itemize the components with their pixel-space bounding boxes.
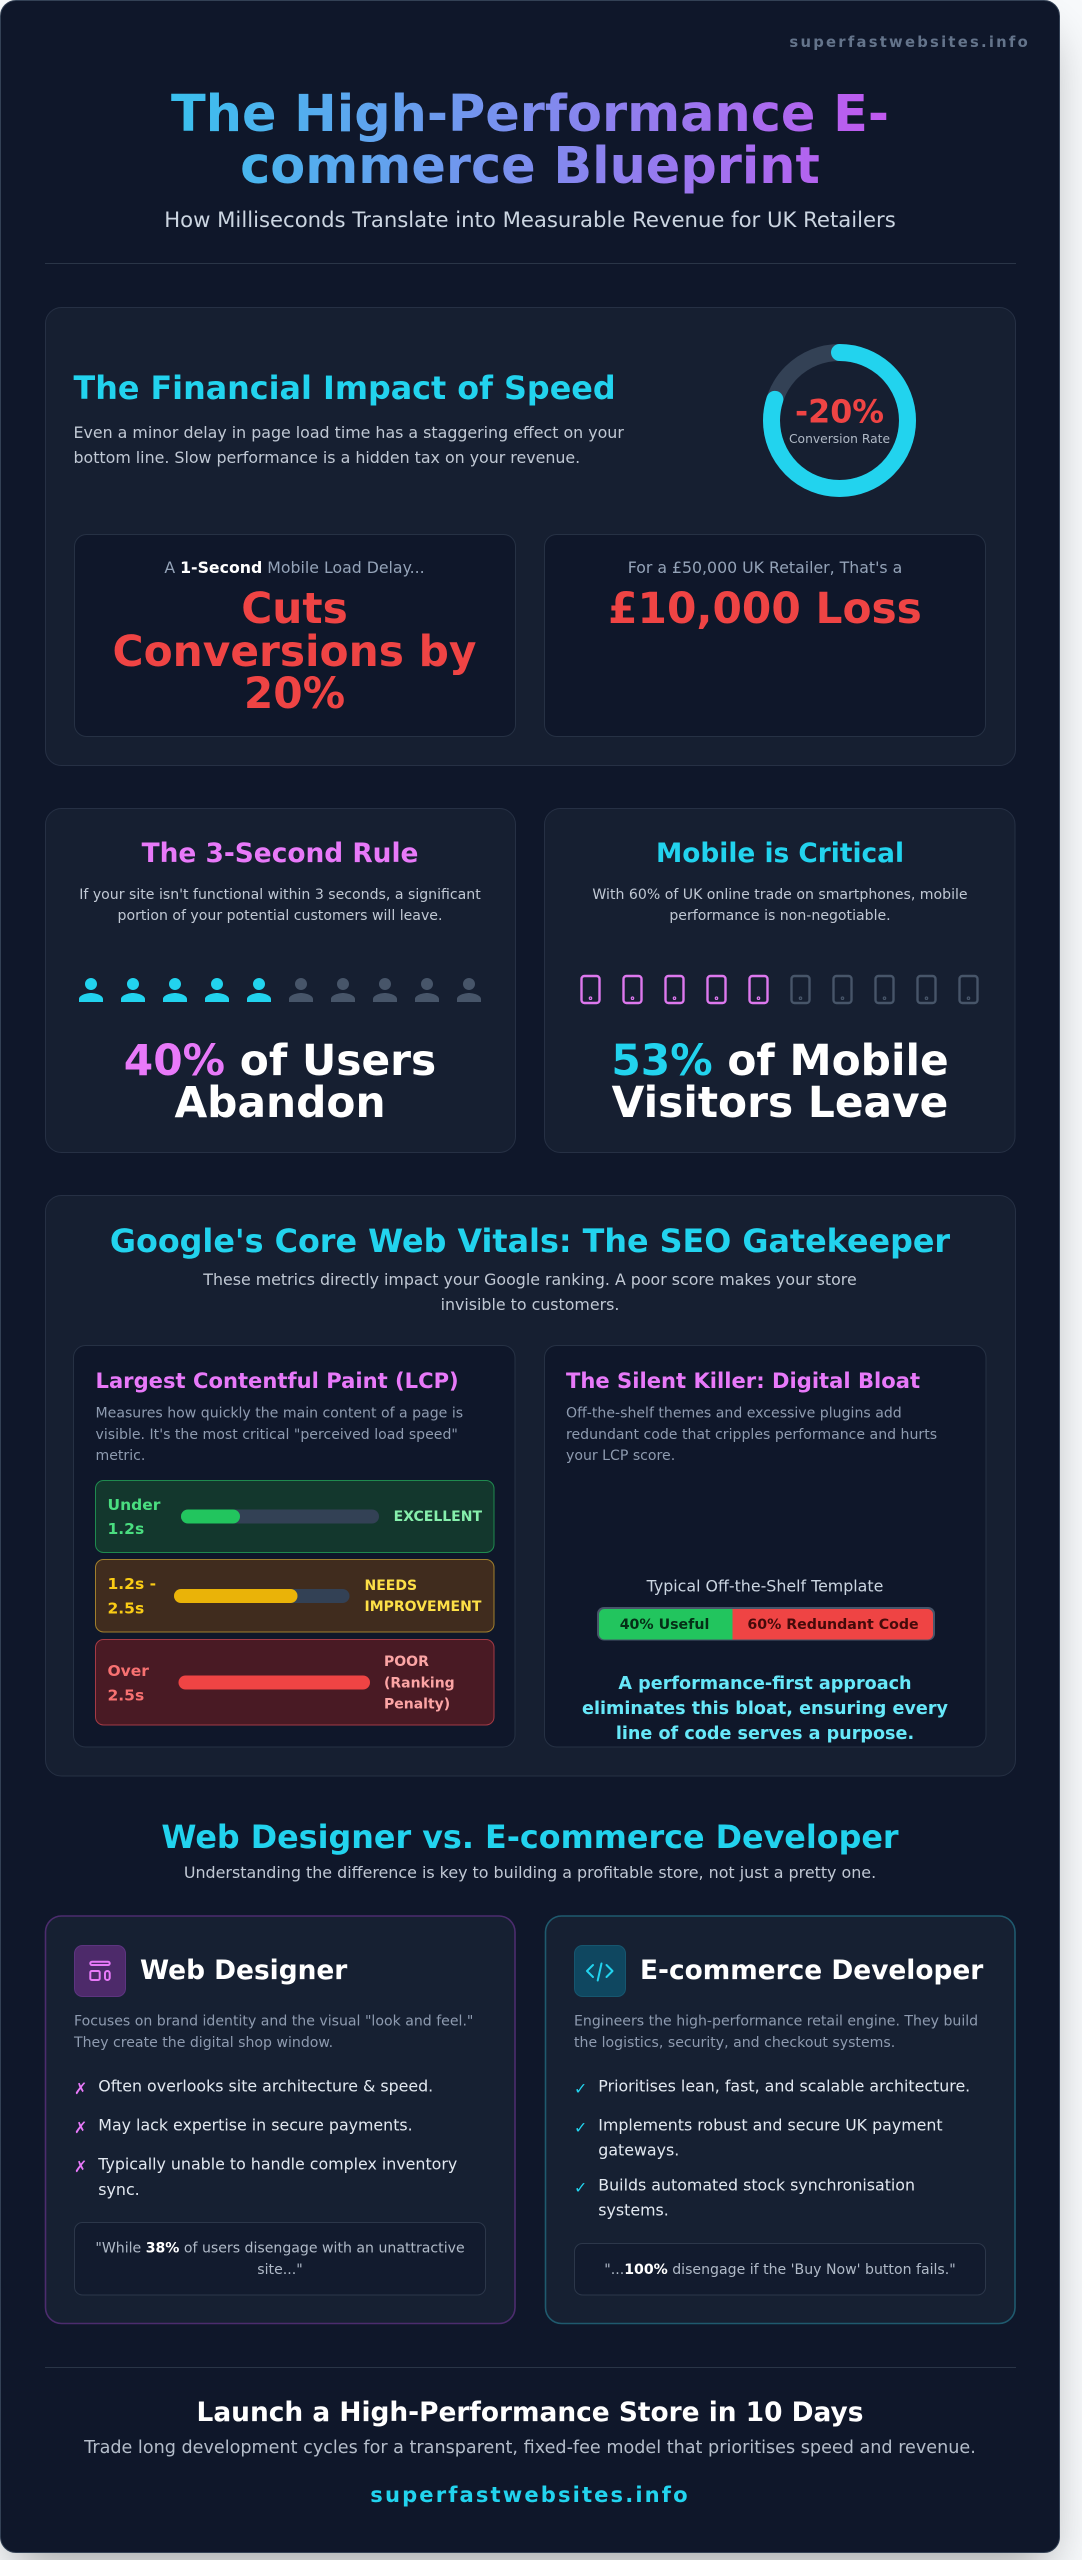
stat: 53% leave: Visitors Leave bbox=[612, 1078, 948, 1127]
section heading: designer vs developer bbox=[161, 1819, 899, 1882]
text: web designer description: They create the digital shop window. bbox=[73, 2035, 333, 2051]
title bbox=[171, 85, 889, 196]
label: template bar: Typical Off-the-Shelf Template bbox=[646, 1576, 883, 1596]
text: LCP description: metric. bbox=[96, 1448, 145, 1464]
list: developer strengths: ✓ bbox=[574, 2178, 587, 2197]
row: needs improvement: 2.5s bbox=[108, 1600, 144, 1618]
text: financial impact intro: Even a minor delay in page load time has a staggering effect on your bbox=[74, 423, 624, 442]
list: developer strengths: ✓ bbox=[574, 2118, 587, 2137]
row: poor: Over bbox=[108, 1662, 149, 1680]
text: core web vitals intro bbox=[202, 1270, 857, 1314]
list: designer drawbacks bbox=[74, 2077, 457, 2199]
heading: 3-second rule: The 3-Second Rule bbox=[142, 838, 418, 869]
stat card: conversion cut: Conversions by bbox=[113, 627, 476, 676]
title: The High-Performance E- bbox=[171, 85, 889, 144]
panel: core web vitals bbox=[46, 1196, 1016, 1776]
row: needs improvement: IMPROVEMENT bbox=[364, 1599, 482, 1615]
text: financial impact intro: bottom line. Slow performance is a hidden tax on your revenue. bbox=[74, 448, 580, 467]
chart: useful vs redundant code bar: 40% Useful bbox=[620, 1617, 709, 1633]
icon: layout bbox=[74, 1946, 126, 1996]
chart: useful vs redundant code bar: 60% Redundant Code bbox=[747, 1617, 919, 1633]
text: web designer description bbox=[73, 2014, 473, 2051]
row: poor: 2.5s bbox=[108, 1686, 144, 1704]
stat card: conversion cut bbox=[74, 534, 516, 736]
quote: developer stat bbox=[574, 2244, 986, 2295]
text: mobile is critical: performance is non-negotiable. bbox=[669, 908, 891, 924]
list: developer strengths: systems. bbox=[598, 2200, 669, 2219]
title: commerce Blueprint bbox=[240, 137, 820, 196]
text: mobile is critical bbox=[592, 887, 968, 924]
heading: LCP: Largest Contentful Paint (LCP) bbox=[96, 1368, 459, 1393]
text: 3-second rule: portion of your potential customers will leave. bbox=[118, 908, 442, 924]
stat: 53% leave: 53% of Mobile bbox=[611, 1036, 949, 1085]
stat card: conversion cut: A 1-Second Mobile Load Delay... bbox=[164, 558, 425, 577]
callout: performance-first: line of code serves a purpose. bbox=[616, 1724, 914, 1744]
text: bloat description bbox=[566, 1406, 937, 1464]
list: developer strengths: ✓ bbox=[574, 2079, 587, 2098]
heading: mobile is critical: Mobile is Critical bbox=[656, 838, 904, 869]
panel: web designer bbox=[46, 1916, 515, 2324]
heading: e-commerce developer: E-commerce Developer bbox=[640, 1955, 983, 1986]
stat: 40% abandon: Abandon bbox=[174, 1078, 386, 1127]
text: 3-second rule bbox=[79, 887, 481, 924]
text: web designer description: Focuses on brand identity and the visual "look and feel." bbox=[74, 2014, 473, 2030]
chart: conversion rate donut: -20% bbox=[795, 395, 884, 431]
chart: conversion rate donut bbox=[772, 352, 908, 488]
row: excellent bbox=[96, 1480, 494, 1552]
footer heading: Launch a High-Performance Store in 10 Days bbox=[197, 2397, 863, 2428]
text: bloat description: Off-the-shelf themes and excessive plugins add bbox=[566, 1406, 902, 1422]
text: LCP description: Measures how quickly the main content of a page is bbox=[96, 1406, 463, 1422]
row: poor: Penalty) bbox=[384, 1696, 450, 1712]
list: designer drawbacks: Typically unable to handle complex inventory bbox=[97, 2155, 457, 2174]
row: poor bbox=[96, 1640, 494, 1725]
row: poor: POOR bbox=[384, 1654, 429, 1670]
text: core web vitals intro: invisible to customers. bbox=[441, 1295, 619, 1314]
stat card: revenue loss: £10,000 Loss bbox=[608, 584, 922, 633]
stat: 53% leave bbox=[611, 1036, 949, 1127]
quote: developer stat: "...100% disengage if the 'Buy Now' button fails." bbox=[604, 2262, 956, 2278]
card: LCP bbox=[74, 1346, 515, 1747]
callout: performance-first: A performance-first approach bbox=[618, 1674, 912, 1694]
stat: 40% abandon: 40% of Users bbox=[124, 1036, 436, 1085]
quote: designer stat: "While 38% of users disengage with an unattractive bbox=[95, 2241, 465, 2257]
text: LCP description bbox=[96, 1406, 463, 1464]
footer bbox=[83, 2397, 976, 2507]
list: designer drawbacks: ✗ bbox=[74, 2118, 87, 2137]
stat card: revenue loss: For a £50,000 UK Retailer, That's a bbox=[628, 558, 902, 577]
list: designer drawbacks: sync. bbox=[98, 2180, 140, 2199]
chart: useful vs redundant code bar bbox=[597, 1607, 935, 1640]
section heading: designer vs developer: Web Designer vs. E-commerce Developer bbox=[161, 1819, 899, 1856]
text: LCP description: visible. It's the most critical "perceived load speed" bbox=[96, 1427, 458, 1443]
panel: financial impact bbox=[46, 308, 1016, 766]
stat card: revenue loss bbox=[544, 534, 986, 736]
icon: code bbox=[574, 1946, 626, 1996]
icons: people 5 of 10 highlighted bbox=[79, 978, 481, 1002]
list: developer strengths bbox=[574, 2077, 970, 2219]
text: 3-second rule: If your site isn't functional within 3 seconds, a significant bbox=[79, 887, 481, 903]
quote: designer stat: site..." bbox=[257, 2262, 303, 2278]
panel: e-commerce developer bbox=[546, 1916, 1015, 2324]
subtitle: How Milliseconds Translate into Measurable Revenue for UK Retailers bbox=[164, 207, 896, 232]
heading: financial impact: The Financial Impact of Speed bbox=[74, 370, 616, 407]
text: bloat description: redundant code that cripples performance and hurts bbox=[566, 1427, 937, 1443]
heading: core web vitals: Google's Core Web Vitals: The SEO Gatekeeper bbox=[110, 1223, 950, 1260]
text: bloat description: your LCP score. bbox=[566, 1448, 675, 1464]
row: needs improvement bbox=[96, 1560, 494, 1632]
text: financial impact intro bbox=[74, 423, 624, 467]
icons: phones 5 of 10 highlighted bbox=[582, 976, 978, 1003]
stat: 40% abandon bbox=[124, 1036, 436, 1127]
header bbox=[164, 34, 1030, 232]
quote: designer stat bbox=[74, 2222, 486, 2295]
list: designer drawbacks: ✗ bbox=[74, 2157, 87, 2176]
site tag: superfastwebsites.info bbox=[789, 34, 1030, 51]
row: excellent: EXCELLENT bbox=[394, 1509, 482, 1525]
text: developer description: the logistics, security, and checkout systems. bbox=[574, 2035, 895, 2051]
text: developer description: Engineers the high-performance retail engine. They build bbox=[574, 2014, 978, 2030]
list: developer strengths: Prioritises lean, fast, and scalable architecture. bbox=[598, 2077, 970, 2096]
row: excellent: Under bbox=[108, 1496, 161, 1514]
list: developer strengths: Implements robust and secure UK payment bbox=[598, 2116, 943, 2135]
heading: digital bloat: The Silent Killer: Digital Bloat bbox=[566, 1368, 920, 1393]
list: developer strengths: gateways. bbox=[598, 2140, 679, 2159]
panel: mobile is critical bbox=[544, 808, 1015, 1152]
row: needs improvement: 1.2s - bbox=[108, 1575, 156, 1593]
footer link: superfastwebsites.info bbox=[370, 2482, 690, 2507]
panel: 3-second rule bbox=[46, 808, 516, 1152]
list: designer drawbacks: Often overlooks site architecture & speed. bbox=[98, 2077, 433, 2096]
callout: performance-first bbox=[582, 1674, 949, 1744]
stat card: conversion cut: Cuts bbox=[241, 584, 348, 633]
chart: conversion rate donut: Conversion Rate bbox=[789, 432, 890, 446]
footer text: Trade long development cycles for a transparent, fixed-fee model that prioritises speed and revenue. bbox=[83, 2438, 976, 2458]
card: digital bloat bbox=[544, 1346, 986, 1747]
list: developer strengths: Builds automated stock synchronisation bbox=[598, 2176, 915, 2195]
section heading: designer vs developer: Understanding the difference is key to building a profitable store, not just a pretty one. bbox=[184, 1863, 876, 1882]
list: designer drawbacks: ✗ bbox=[74, 2079, 87, 2098]
row: needs improvement: NEEDS bbox=[364, 1578, 417, 1594]
row: poor: (Ranking bbox=[384, 1676, 455, 1692]
text: mobile is critical: With 60% of UK online trade on smartphones, mobile bbox=[592, 887, 968, 903]
heading: web designer: Web Designer bbox=[140, 1955, 347, 1986]
list: designer drawbacks: May lack expertise in secure payments. bbox=[98, 2116, 413, 2135]
stat card: conversion cut: 20% bbox=[244, 669, 345, 718]
callout: performance-first: eliminates this bloat, ensuring every bbox=[582, 1699, 949, 1719]
text: core web vitals intro: These metrics directly impact your Google ranking. A poor score makes your store bbox=[202, 1270, 857, 1289]
row: excellent: 1.2s bbox=[108, 1520, 144, 1538]
text: developer description bbox=[574, 2014, 978, 2051]
